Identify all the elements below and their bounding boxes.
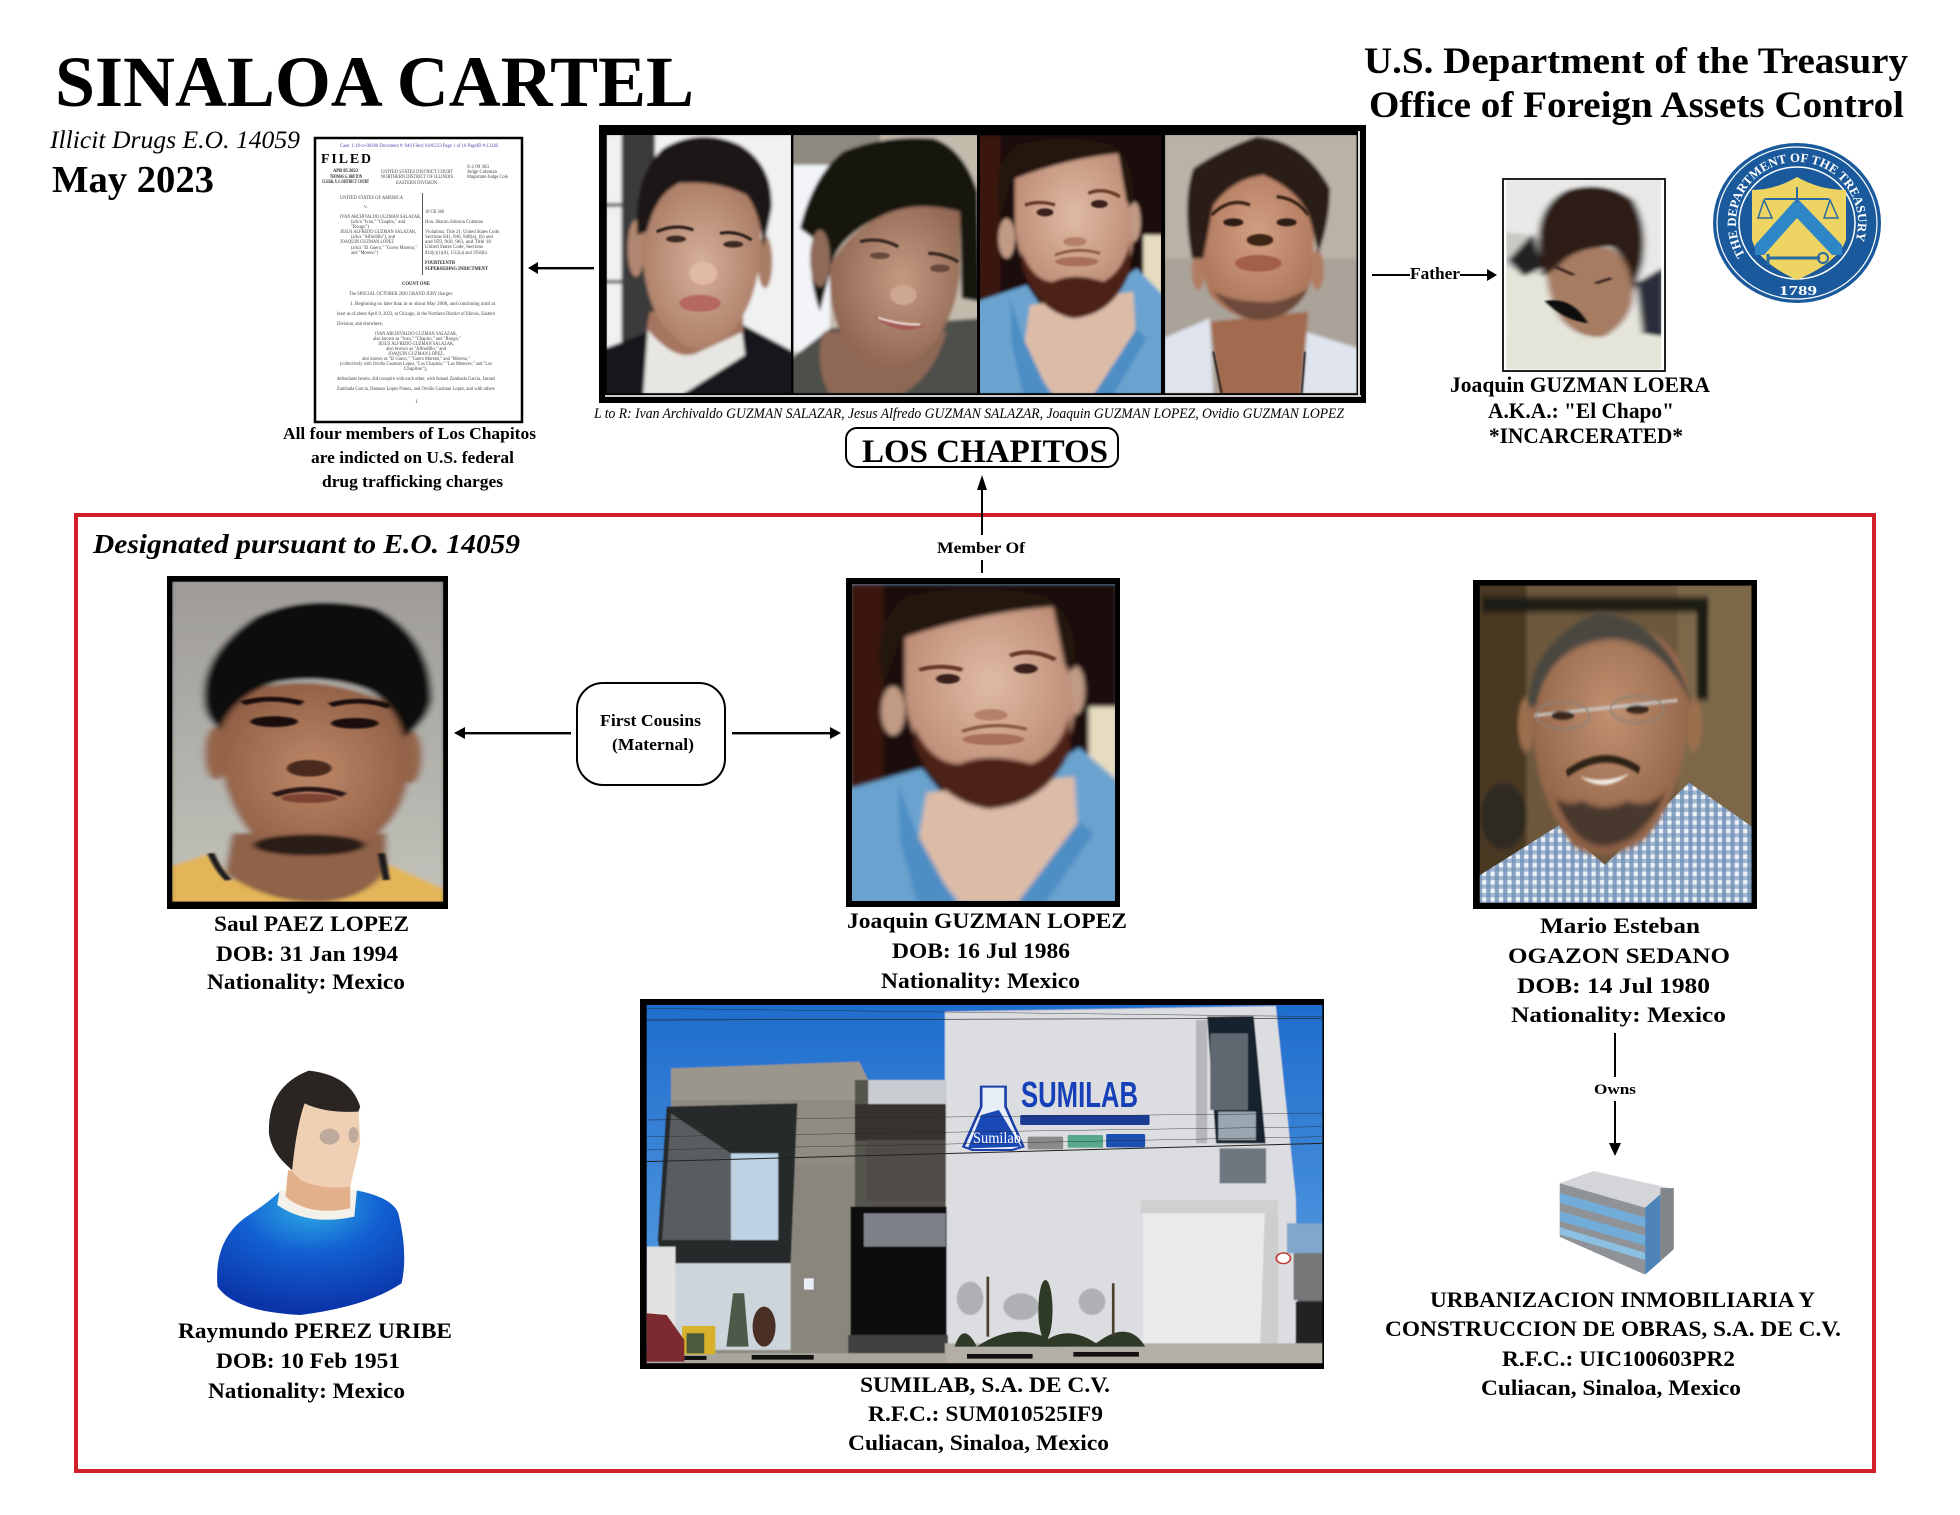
caption: Urbanizacion Inmobiliaria: Culiacan, Sinaloa, Mexico	[1481, 1375, 1741, 1400]
caption: Joaquin Guzman Loera: A.K.A.: "El Chapo"	[1488, 398, 1674, 423]
panel: indictment document: Division, and elsewhere,	[337, 321, 384, 327]
icon: Treasury seal	[1713, 143, 1881, 303]
caption: Mario Esteban Ogazon Sedano	[1508, 913, 1730, 1027]
panel: Los Chapitos photo strip	[599, 125, 1366, 403]
panel: indictment document: UNITED STATES OF AMERICA	[340, 195, 403, 201]
agency heading	[1364, 41, 1909, 126]
caption: Mario Esteban Ogazon Sedano: Nationality: Mexico	[1511, 1002, 1726, 1027]
panel: indictment document: NORTHERN DISTRICT OF ILLINOIS	[381, 174, 453, 180]
panel: indictment document: Zambada Garcia, Damaso Lopez Nunez, and Ovidio Guzman Lopez, and with others	[337, 386, 495, 392]
panel: designated pursuant to E.O. 14059	[76, 475, 1874, 1471]
caption: Raymundo Perez Uribe	[178, 1318, 452, 1403]
subtitle: program: Illicit Drugs E.O. 14059	[49, 127, 301, 154]
panel: indictment document: Hon. Sharon Johnson Coleman	[425, 219, 483, 225]
heading: designated: Designated pursuant to E.O. 14059	[92, 529, 521, 559]
panel: indictment document: 924(c)(1)(A), 1512(a) and 1956(h)	[425, 249, 487, 256]
panel: indictment document: JOAQUIN GUZMAN LOPEZ	[340, 239, 394, 245]
caption: Sumilab: Culiacan, Sinaloa, Mexico	[848, 1430, 1109, 1455]
arrow: member of: Member Of	[937, 540, 1026, 557]
photo: Mario Esteban Ogazon Sedano	[1473, 580, 1757, 909]
panel: indictment document: FILED	[321, 152, 373, 167]
panel: indictment document: Magistrate Judge Cole	[467, 174, 508, 180]
photo: Joaquin Guzman Lopez (small)	[977, 135, 1163, 395]
panel: indictment document: FOURTEENTH	[425, 260, 456, 266]
panel: indictment document: The SPECIAL OCTOBER 2020 GRAND JURY charges:	[349, 291, 453, 297]
label: Los Chapitos: LOS CHAPITOS	[862, 434, 1108, 470]
photo: Sumilab building: Sumilab	[973, 1130, 1021, 1147]
icon: placeholder person (Raymundo Perez Uribe)	[217, 1071, 404, 1315]
panel: indictment document: COUNT ONE	[402, 281, 430, 287]
arrow: father: Father	[1410, 264, 1460, 283]
caption: Joaquin Guzman Lopez: DOB: 16 Jul 1986	[892, 938, 1070, 963]
panel: indictment document: S-2 09 383	[467, 164, 489, 170]
caption: Joaquin Guzman Lopez	[847, 908, 1127, 993]
caption: indictment: are indicted on U.S. federal	[311, 448, 514, 467]
panel: indictment document: also known as "Ivan," "Chapito," and "Rougo,"	[373, 336, 461, 342]
arrow: to Joaquin	[732, 727, 841, 739]
caption: indictment: All four members of Los Chapitos	[283, 424, 536, 443]
caption: Saul Paez Lopez	[207, 911, 409, 994]
panel: indictment document	[315, 138, 522, 422]
photo: Joaquin Guzman Loera	[1502, 178, 1665, 372]
panel: indictment document: Violations: Title 21, United States Code,	[425, 229, 501, 235]
panel: indictment document: and 959, 960, 963, and Title 18	[425, 239, 491, 245]
panel: indictment document: 18 CR 380	[425, 209, 444, 215]
photo: Jesus Alfredo Guzman Salazar	[792, 133, 980, 395]
caption: Joaquin Guzman Loera	[1450, 372, 1710, 448]
photo: Ivan Archivaldo Guzman Salazar	[605, 133, 793, 395]
caption: indictment	[283, 424, 536, 491]
icon: Treasury seal: THE DEPARTMENT OF THE TREASURY	[1728, 154, 1867, 260]
caption: Saul Paez Lopez: Saul PAEZ LOPEZ	[214, 911, 409, 936]
caption: Urbanizacion Inmobiliaria: URBANIZACION INMOBILIARIA Y	[1430, 1287, 1815, 1312]
caption: Joaquin Guzman Loera: *INCARCERATED*	[1489, 423, 1683, 448]
panel: indictment document: THOMAS G. BRUTON	[330, 174, 362, 180]
photo: Sumilab building: SUMILAB	[1021, 1074, 1138, 1115]
caption: indictment: drug trafficking charges	[322, 472, 503, 491]
panel: indictment document: (a/k/a "Alfredillo"), and	[351, 233, 395, 240]
panel: indictment document: IVAN ARCHIVALDO GUZMAN SALAZAR,	[340, 214, 421, 220]
callout: first cousins	[577, 683, 725, 785]
caption: Joaquin Guzman Loera: Joaquin GUZMAN LOERA	[1450, 372, 1710, 397]
panel: indictment document: Sections 841, 846, 848(a), (b) and	[425, 233, 493, 240]
panel: indictment document: JESUS ALFREDO GUZMAN SALAZAR,	[378, 341, 454, 347]
caption: Saul Paez Lopez: Nationality: Mexico	[207, 969, 405, 994]
panel: indictment document: (a/k/a "Ivan," "Chapito," and	[351, 218, 405, 225]
caption: Urbanizacion Inmobiliaria	[1385, 1287, 1841, 1400]
caption: Raymundo Perez Uribe: Raymundo PEREZ URIBE	[178, 1318, 452, 1343]
panel: indictment document: SUPERSEDING INDICTMENT	[425, 266, 488, 272]
panel: indictment document: "Rougo")	[351, 223, 369, 230]
caption: Saul Paez Lopez: DOB: 31 Jan 1994	[216, 941, 398, 966]
callout: first cousins: (Maternal)	[612, 735, 694, 754]
arrow: to Saul	[454, 727, 571, 739]
photo: Saul Paez Lopez	[167, 576, 448, 909]
caption: Raymundo Perez Uribe: Nationality: Mexico	[208, 1378, 405, 1403]
arrow: owns: Owns	[1594, 1082, 1636, 1098]
panel: indictment document: APR 05 2023	[333, 168, 358, 174]
caption: Sumilab: SUMILAB, S.A. DE C.V.	[860, 1372, 1110, 1397]
photo: Sumilab building	[640, 999, 1325, 1369]
panel: indictment document: EASTERN DIVISION	[396, 180, 437, 186]
photo: Joaquin Guzman Lopez	[846, 578, 1120, 907]
panel: indictment document: v.	[364, 204, 368, 210]
icon: office building	[1560, 1171, 1674, 1275]
panel: indictment document: also known as "El Guero," "Guero Moreno," and "Moreno,"	[362, 356, 470, 362]
caption: Mario Esteban Ogazon Sedano: OGAZON SEDANO	[1508, 943, 1730, 968]
caption: Urbanizacion Inmobiliaria: R.F.C.: UIC100603PR2	[1502, 1346, 1735, 1371]
panel: indictment document: (collectively with Ovidio Guzman Lopez, "Los Chapitos," "Los Menores," and "Los	[340, 360, 492, 367]
agency heading: Office of Foreign Assets Control	[1369, 85, 1904, 126]
panel: indictment document: United States Code, Sections	[425, 244, 483, 250]
caption: photo strip names: L to R: Ivan Archivaldo GUZMAN SALAZAR, Jesus Alfredo GUZMAN SALAZAR, Joaquin GUZMAN LOPEZ, Ovidio GUZMAN LOPEZ	[593, 406, 1345, 422]
panel: indictment document: 1	[415, 399, 418, 405]
arrow: member of	[937, 475, 1026, 573]
agency heading: U.S. Department of the Treasury	[1364, 41, 1909, 82]
panel: indictment document: CLERK, U.S. DISTRICT COURT	[322, 179, 369, 185]
panel: indictment document: IVAN ARCHIVALDO GUZMAN SALAZAR,	[375, 331, 457, 337]
panel: indictment document: least as of about April 9, 2023, at Chicago, in the Northern District of Illinois, Eastern	[337, 310, 495, 317]
caption: Urbanizacion Inmobiliaria: CONSTRUCCION DE OBRAS, S.A. DE C.V.	[1385, 1316, 1841, 1341]
panel: indictment document: (a/k/a "El Guero," "Guero Moreno,"	[351, 244, 417, 251]
icon: Treasury seal: 1789	[1779, 284, 1817, 299]
caption: Joaquin Guzman Lopez: Nationality: Mexico	[881, 968, 1080, 993]
caption: Mario Esteban Ogazon Sedano: Mario Esteban	[1540, 913, 1700, 938]
arrow: photos to indictment	[528, 262, 594, 274]
caption: Raymundo Perez Uribe: DOB: 10 Feb 1951	[216, 1348, 400, 1373]
caption: Sumilab: R.F.C.: SUM010525IF9	[868, 1401, 1103, 1426]
caption: Joaquin Guzman Lopez: Joaquin GUZMAN LOPEZ	[847, 908, 1127, 933]
panel: indictment document: UNITED STATES DISTRICT COURT	[381, 169, 454, 175]
callout: first cousins: First Cousins	[600, 711, 701, 730]
date: May 2023	[52, 159, 214, 201]
photo: Ovidio Guzman Lopez	[1163, 133, 1358, 395]
panel: indictment document: defendants herein, did conspire with each other, with Ismael Zambada Garcia, Ismael	[337, 375, 495, 382]
arrow: owns	[1594, 1033, 1636, 1156]
panel: indictment document: JOAQUIN GUZMAN LOPEZ,	[388, 351, 444, 357]
arrow: father	[1372, 264, 1497, 283]
panel: indictment document: Chapitos"),	[404, 365, 428, 372]
panel: indictment document: Judge Coleman	[467, 169, 497, 175]
title: SINALOA CARTEL	[55, 42, 694, 122]
panel: indictment document: and "Moreno")	[351, 249, 378, 256]
panel: indictment document: Case: 1:18-cr-00380 Document #: 946 Filed: 04/05/23 Page 1 of 16 PageID #:13340	[340, 142, 498, 149]
panel: indictment document: JESUS ALFREDO GUZMAN SALAZAR,	[340, 229, 416, 235]
caption: Mario Esteban Ogazon Sedano: DOB: 14 Jul 1980	[1517, 973, 1710, 998]
caption: Sumilab	[848, 1372, 1110, 1455]
panel: indictment document: also known as "Alfredillo," and	[386, 345, 446, 352]
panel: indictment document: 1. Beginning no later than in or about May 2008, and continuing until at	[350, 301, 495, 307]
